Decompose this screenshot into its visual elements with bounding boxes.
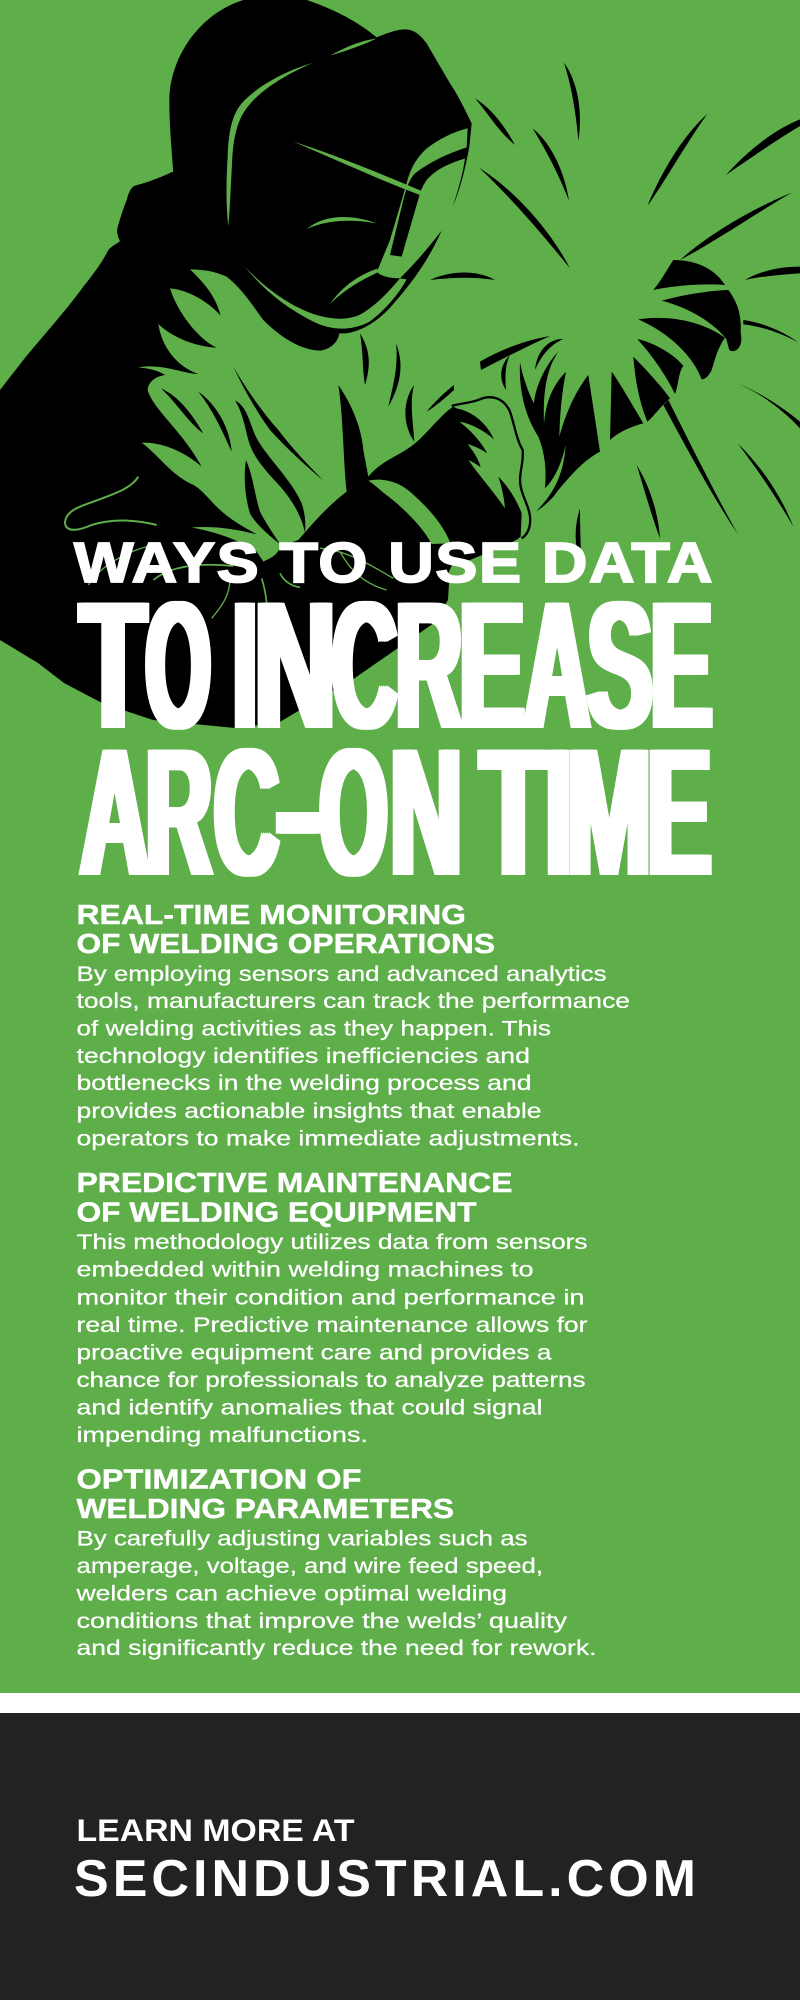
illustration: welder silhouette [0, 0, 800, 728]
sleeve folds and lines [65, 367, 393, 618]
section body text: and significantly reduce the need for rework. [76, 1637, 596, 1660]
section body text: chance for professionals to analyze patterns [76, 1369, 586, 1392]
title line: arc-on time: C [214, 710, 279, 914]
helmet highlights [226, 38, 423, 329]
section: optimization [75, 1464, 597, 1660]
section body text: By carefully adjusting variables such as [76, 1528, 528, 1550]
title line: to increase: T [80, 563, 146, 767]
section body text [76, 1231, 588, 1447]
title line: to increase: N [254, 563, 336, 767]
title line: arc-on time: R [146, 710, 212, 914]
footer text: learn more at: LEARN MORE AT [76, 1812, 354, 1848]
section body text: impending malfunctions. [76, 1424, 368, 1447]
title line: to increase: E [459, 563, 525, 767]
title line: to increase: R [396, 563, 462, 767]
white divider band [0, 1693, 800, 1713]
section heading: WELDING PARAMETERS [76, 1493, 454, 1524]
section heading: REAL-TIME MONITORING [76, 899, 466, 930]
title line: arc-on time: I [545, 710, 572, 914]
section body text: proactive equipment care and provides a [76, 1342, 552, 1364]
section body text: This methodology utilizes data from sensors [76, 1231, 588, 1254]
section heading: PREDICTIVE MAINTENANCE [76, 1167, 512, 1198]
section: real-time monitoring [76, 899, 630, 1150]
section body text: embedded within welding machines to [76, 1258, 534, 1282]
section body text: of welding activities as they happen. This [76, 1018, 551, 1040]
title line: to increase: A [524, 563, 590, 767]
arm and sleeve [480, 260, 741, 512]
title line: arc-on time: A [80, 710, 149, 914]
section body text: and identify anomalies that could signal [76, 1396, 542, 1420]
title line: to increase: C [332, 563, 397, 767]
section body text: provides actionable insights that enable [76, 1100, 542, 1123]
footer text: website: SECINDUSTRIAL.COM [74, 1850, 696, 1908]
section body text: conditions that improve the welds’ quality [76, 1610, 568, 1633]
section heading [76, 1167, 512, 1228]
welder body and torso [0, 172, 522, 728]
title line: arc-on time: O [320, 710, 388, 914]
title line: to increase: S [587, 563, 653, 767]
section heading: OF WELDING EQUIPMENT [76, 1196, 477, 1228]
heading: ways to use data: WAYS TO USE DATA [74, 531, 714, 595]
section body text: By employing sensors and advanced analytics [76, 963, 606, 986]
section body text [76, 963, 630, 1150]
title line: arc-on time: T [480, 710, 547, 914]
hand and glove [360, 333, 530, 544]
section heading [76, 1464, 454, 1524]
title line: arc-on time: - [274, 705, 323, 909]
title line: arc-on time: M [567, 710, 651, 914]
section body text: amperage, voltage, and wire feed speed, [76, 1555, 543, 1578]
section body text: bottlenecks in the welding process and [76, 1072, 532, 1095]
section body text: tools, manufacturers can track the performance [76, 990, 630, 1013]
section heading: OPTIMIZATION OF [76, 1464, 362, 1494]
section: predictive maintenance [76, 1167, 588, 1447]
section body text [75, 1528, 597, 1660]
section body text: technology identifies inefficiencies and [76, 1045, 530, 1068]
title line: arc-on time: E [647, 710, 712, 914]
title line: to increase: E [650, 563, 712, 767]
section heading [76, 899, 495, 959]
panel: footer [0, 1713, 800, 2000]
section body text: real time. Predictive maintenance allows for [76, 1314, 588, 1337]
title line: to increase: I [233, 563, 257, 767]
sparks [430, 63, 800, 567]
section heading: OF WELDING OPERATIONS [76, 928, 495, 959]
title line: arc-on time: N [390, 710, 462, 914]
section body text: operators to make immediate adjustments. [76, 1128, 580, 1150]
welder hood and helmet [150, 0, 472, 351]
title line: to increase: O [146, 563, 211, 767]
title: to increase arc-on time [80, 563, 712, 914]
section body text: welders can achieve optimal welding [75, 1582, 507, 1606]
section body text: monitor their condition and performance in [76, 1286, 584, 1310]
